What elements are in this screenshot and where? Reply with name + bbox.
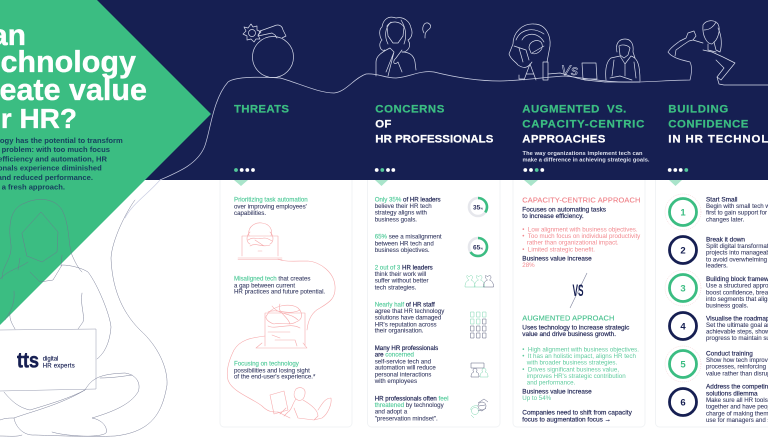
augmented approach: value and drive business growth. xyxy=(522,331,616,338)
icon: laptop with brain scribble xyxy=(256,304,307,348)
capacity-centric approach: Business value increase xyxy=(522,255,592,262)
chart: 35% donut: 35% xyxy=(473,204,483,212)
green arrow panel xyxy=(0,0,211,325)
vs divider: VS xyxy=(572,281,584,300)
icon: person at laptop xyxy=(270,388,331,420)
step 6 xyxy=(670,384,768,424)
vs divider xyxy=(570,273,587,308)
step 2: 2 xyxy=(680,246,686,256)
heading: building confidence in HR technology: BUILDING xyxy=(668,103,728,115)
augmented approach: Up to 54% xyxy=(522,395,552,402)
concern 3 text xyxy=(375,264,433,291)
heading: building confidence in HR technology xyxy=(668,103,768,145)
concern 4 text: HR's reputation across xyxy=(375,321,437,328)
concern 3 text: tech strategies. xyxy=(375,284,417,291)
capacity-centric approach: CAPACITY-CENTRIC APPROACH xyxy=(522,196,640,204)
logo: tts digital HR experts: HR experts xyxy=(43,364,75,370)
capacity-centric approach: 28% xyxy=(522,262,535,269)
step 6: solutions dilemma xyxy=(706,390,758,397)
capacity-centric approach: • Low alignment with business objectives. xyxy=(522,226,638,233)
capacity-centric approach: rather than organizational impact. xyxy=(527,240,619,247)
step 3: business goals. xyxy=(706,303,749,310)
logo: tts digital HR experts xyxy=(17,350,75,373)
step 2 xyxy=(670,236,768,270)
title xyxy=(0,19,147,134)
concern 6 text: HR professionals often feel xyxy=(375,395,448,402)
step 2: Break it down xyxy=(706,236,745,243)
concern 5 text: self-service tech and xyxy=(375,358,432,365)
augmented approach: and performance. xyxy=(527,380,576,387)
panel: threats xyxy=(227,196,335,420)
heading: augmented vs capacity-centric approaches: APPROACHES xyxy=(522,133,606,145)
augmented approach: • It has an holistic impact, aligns HR tech xyxy=(522,353,636,360)
step 4: Visualise the roadmap xyxy=(706,315,768,322)
intro text xyxy=(0,136,123,191)
icon: three leaders xyxy=(465,275,494,287)
step 4 xyxy=(670,312,768,342)
augmented approach: with broader business strategies. xyxy=(526,360,618,367)
concern 1 text: Only 35% of HR leaders xyxy=(375,196,441,203)
step 1: changes later. xyxy=(706,216,745,223)
concern 3 text: suffer without better xyxy=(375,278,429,285)
augmented approach: AUGMENTED APPROACH xyxy=(522,314,614,322)
icon: flexing confident woman xyxy=(675,21,768,85)
capacity-centric approach: • Too much focus on individual productivity xyxy=(522,233,641,240)
concern 1 text: strategy aligns with xyxy=(375,210,428,217)
illustration: person with laptop xyxy=(0,199,167,436)
threat 3 text xyxy=(234,361,316,381)
logo: tts digital HR experts: digital xyxy=(43,356,58,362)
step 5: 5 xyxy=(680,360,686,370)
concern 4 text: solutions have damaged xyxy=(375,315,442,322)
concern 4 text: agree that HR technology xyxy=(375,308,445,315)
icon: laptop with headset xyxy=(238,223,282,260)
threat 1 text: capabilities. xyxy=(234,210,266,217)
threat 1 text: over improving employees' xyxy=(234,203,307,210)
augmented approach: Business value increase xyxy=(522,388,592,395)
concern 5 text: are concerned xyxy=(375,352,415,359)
concern 6 text: "preservation mindset". xyxy=(375,415,438,422)
chart: 65% donut xyxy=(469,238,487,256)
heading: augmented vs capacity-centric approaches: CAPACITY-CENTRIC xyxy=(522,118,644,130)
step 4: 4 xyxy=(680,322,686,332)
heading: augmented vs capacity-centric approaches: make a difference in achieving strategic goals. xyxy=(522,158,650,164)
concern 2 text xyxy=(375,234,442,254)
section pointers xyxy=(234,180,682,186)
threat 1 text xyxy=(234,196,308,217)
threat 3 text: of the end-user's experience.* xyxy=(234,374,316,381)
step 6: 6 xyxy=(680,398,686,408)
concern 5 text: Many HR professionals xyxy=(375,345,438,352)
augmented approach: Uses technology to increase strategic xyxy=(522,324,630,331)
heading: concerns of HR professionals: HR PROFESSIONALS xyxy=(375,133,494,145)
heading: augmented vs capacity-centric approaches: The way organizations implement tech can xyxy=(522,151,643,157)
icon: worried woman with question mark xyxy=(376,17,431,76)
augmented approach xyxy=(522,314,639,423)
connecting line across the header and person silhouette xyxy=(125,41,692,218)
panel: approaches xyxy=(522,196,641,423)
panel: concerns xyxy=(374,196,494,422)
augmented approach: • High alignment with business objectives. xyxy=(522,346,639,353)
panel cards background xyxy=(220,175,768,427)
icon: bomb xyxy=(243,24,294,78)
header band xyxy=(0,0,768,180)
threat 2 text: Misaligned tech that creates xyxy=(234,276,310,283)
heading: augmented vs capacity-centric approaches: AUGMENTED VS. xyxy=(522,103,626,115)
heading: augmented vs capacity-centric approaches xyxy=(522,103,650,164)
heading: building confidence in HR technology: CONFIDENCE xyxy=(668,118,749,130)
augmented approach: Companies need to shift from capacity xyxy=(522,410,633,417)
icon: staff grid xyxy=(470,312,486,338)
icon: AI head vs human with laptop xyxy=(509,24,640,82)
threat 1 text: Prioritizing task automation xyxy=(234,196,308,203)
concern 6 text: threatened by technology xyxy=(375,402,445,409)
concern 6 text: and adopt a xyxy=(375,409,408,416)
threat 2 text xyxy=(234,276,325,296)
threat 3 text: possibilities and losing sight xyxy=(234,367,310,374)
concern 5 text: personal interactions xyxy=(375,371,431,378)
concern 5 text: automation will reduce xyxy=(375,365,436,372)
step 1: Start Small xyxy=(706,196,737,203)
concern 2 text: between HR tech and xyxy=(375,240,434,247)
augmented approach: improves HR's strategic contribution xyxy=(527,373,626,380)
threat 3 text: Focusing on technology xyxy=(234,361,300,368)
concern 3 text: 2 out of 3 HR leaders xyxy=(375,264,433,271)
step 3 xyxy=(665,270,768,310)
concern 3 text: think their work will xyxy=(375,271,426,278)
step 3: 3 xyxy=(680,284,686,294)
panel: building confidence xyxy=(665,194,768,424)
text: Vs: Vs xyxy=(561,62,578,78)
icon: threatened person xyxy=(471,399,488,418)
header band overlap xyxy=(212,174,768,180)
heading: concerns of HR professionals: OF xyxy=(375,118,391,130)
step 1: 1 xyxy=(680,208,686,218)
concern 2 text: 65% see a misalignment xyxy=(375,234,442,241)
chart: 65% donut: 65% xyxy=(473,244,483,252)
concern 4 text xyxy=(375,301,445,335)
chart: 35% donut xyxy=(469,198,487,216)
concern 1 text: business goals. xyxy=(375,216,417,223)
step 5 xyxy=(665,346,768,382)
threats connecting line xyxy=(227,259,335,412)
capacity-centric approach xyxy=(522,196,641,269)
concern 4 text: Nearly half of HR staff xyxy=(375,301,435,308)
step 1 xyxy=(665,194,768,230)
concern 4 text: their organisation. xyxy=(375,328,424,335)
logo: tts digital HR experts: tts xyxy=(17,350,39,373)
augmented approach: focus to augmentation focus → xyxy=(522,416,611,423)
augmented approach: • Drives significant business value, xyxy=(522,366,619,373)
concern 1 text xyxy=(375,196,441,223)
heading: concerns of HR professionals xyxy=(375,103,494,145)
threat 2 text: HR practices and future potential. xyxy=(234,289,325,296)
heading: concerns of HR professionals: CONCERNS xyxy=(375,103,445,115)
concern 5 text xyxy=(374,345,438,385)
step 2: leaders. xyxy=(706,263,728,270)
concern 5 text: with employees xyxy=(374,378,417,385)
icon: two people with speech box xyxy=(471,363,488,377)
concern 1 text: believe their HR tech xyxy=(375,203,432,210)
capacity-centric approach: • Limited strategic benefit. xyxy=(522,246,595,253)
concern 2 text: business objectives. xyxy=(375,247,430,254)
capacity-centric approach: Focuses on automating tasks xyxy=(522,206,606,213)
step 5: Conduct training xyxy=(706,350,753,358)
concern 6 text xyxy=(375,395,448,422)
heading: threats: THREATS xyxy=(234,103,289,115)
threat 2 text: a gap between current xyxy=(234,282,295,289)
capacity-centric approach: to increase efficiency. xyxy=(522,213,584,220)
section dots xyxy=(234,168,688,172)
